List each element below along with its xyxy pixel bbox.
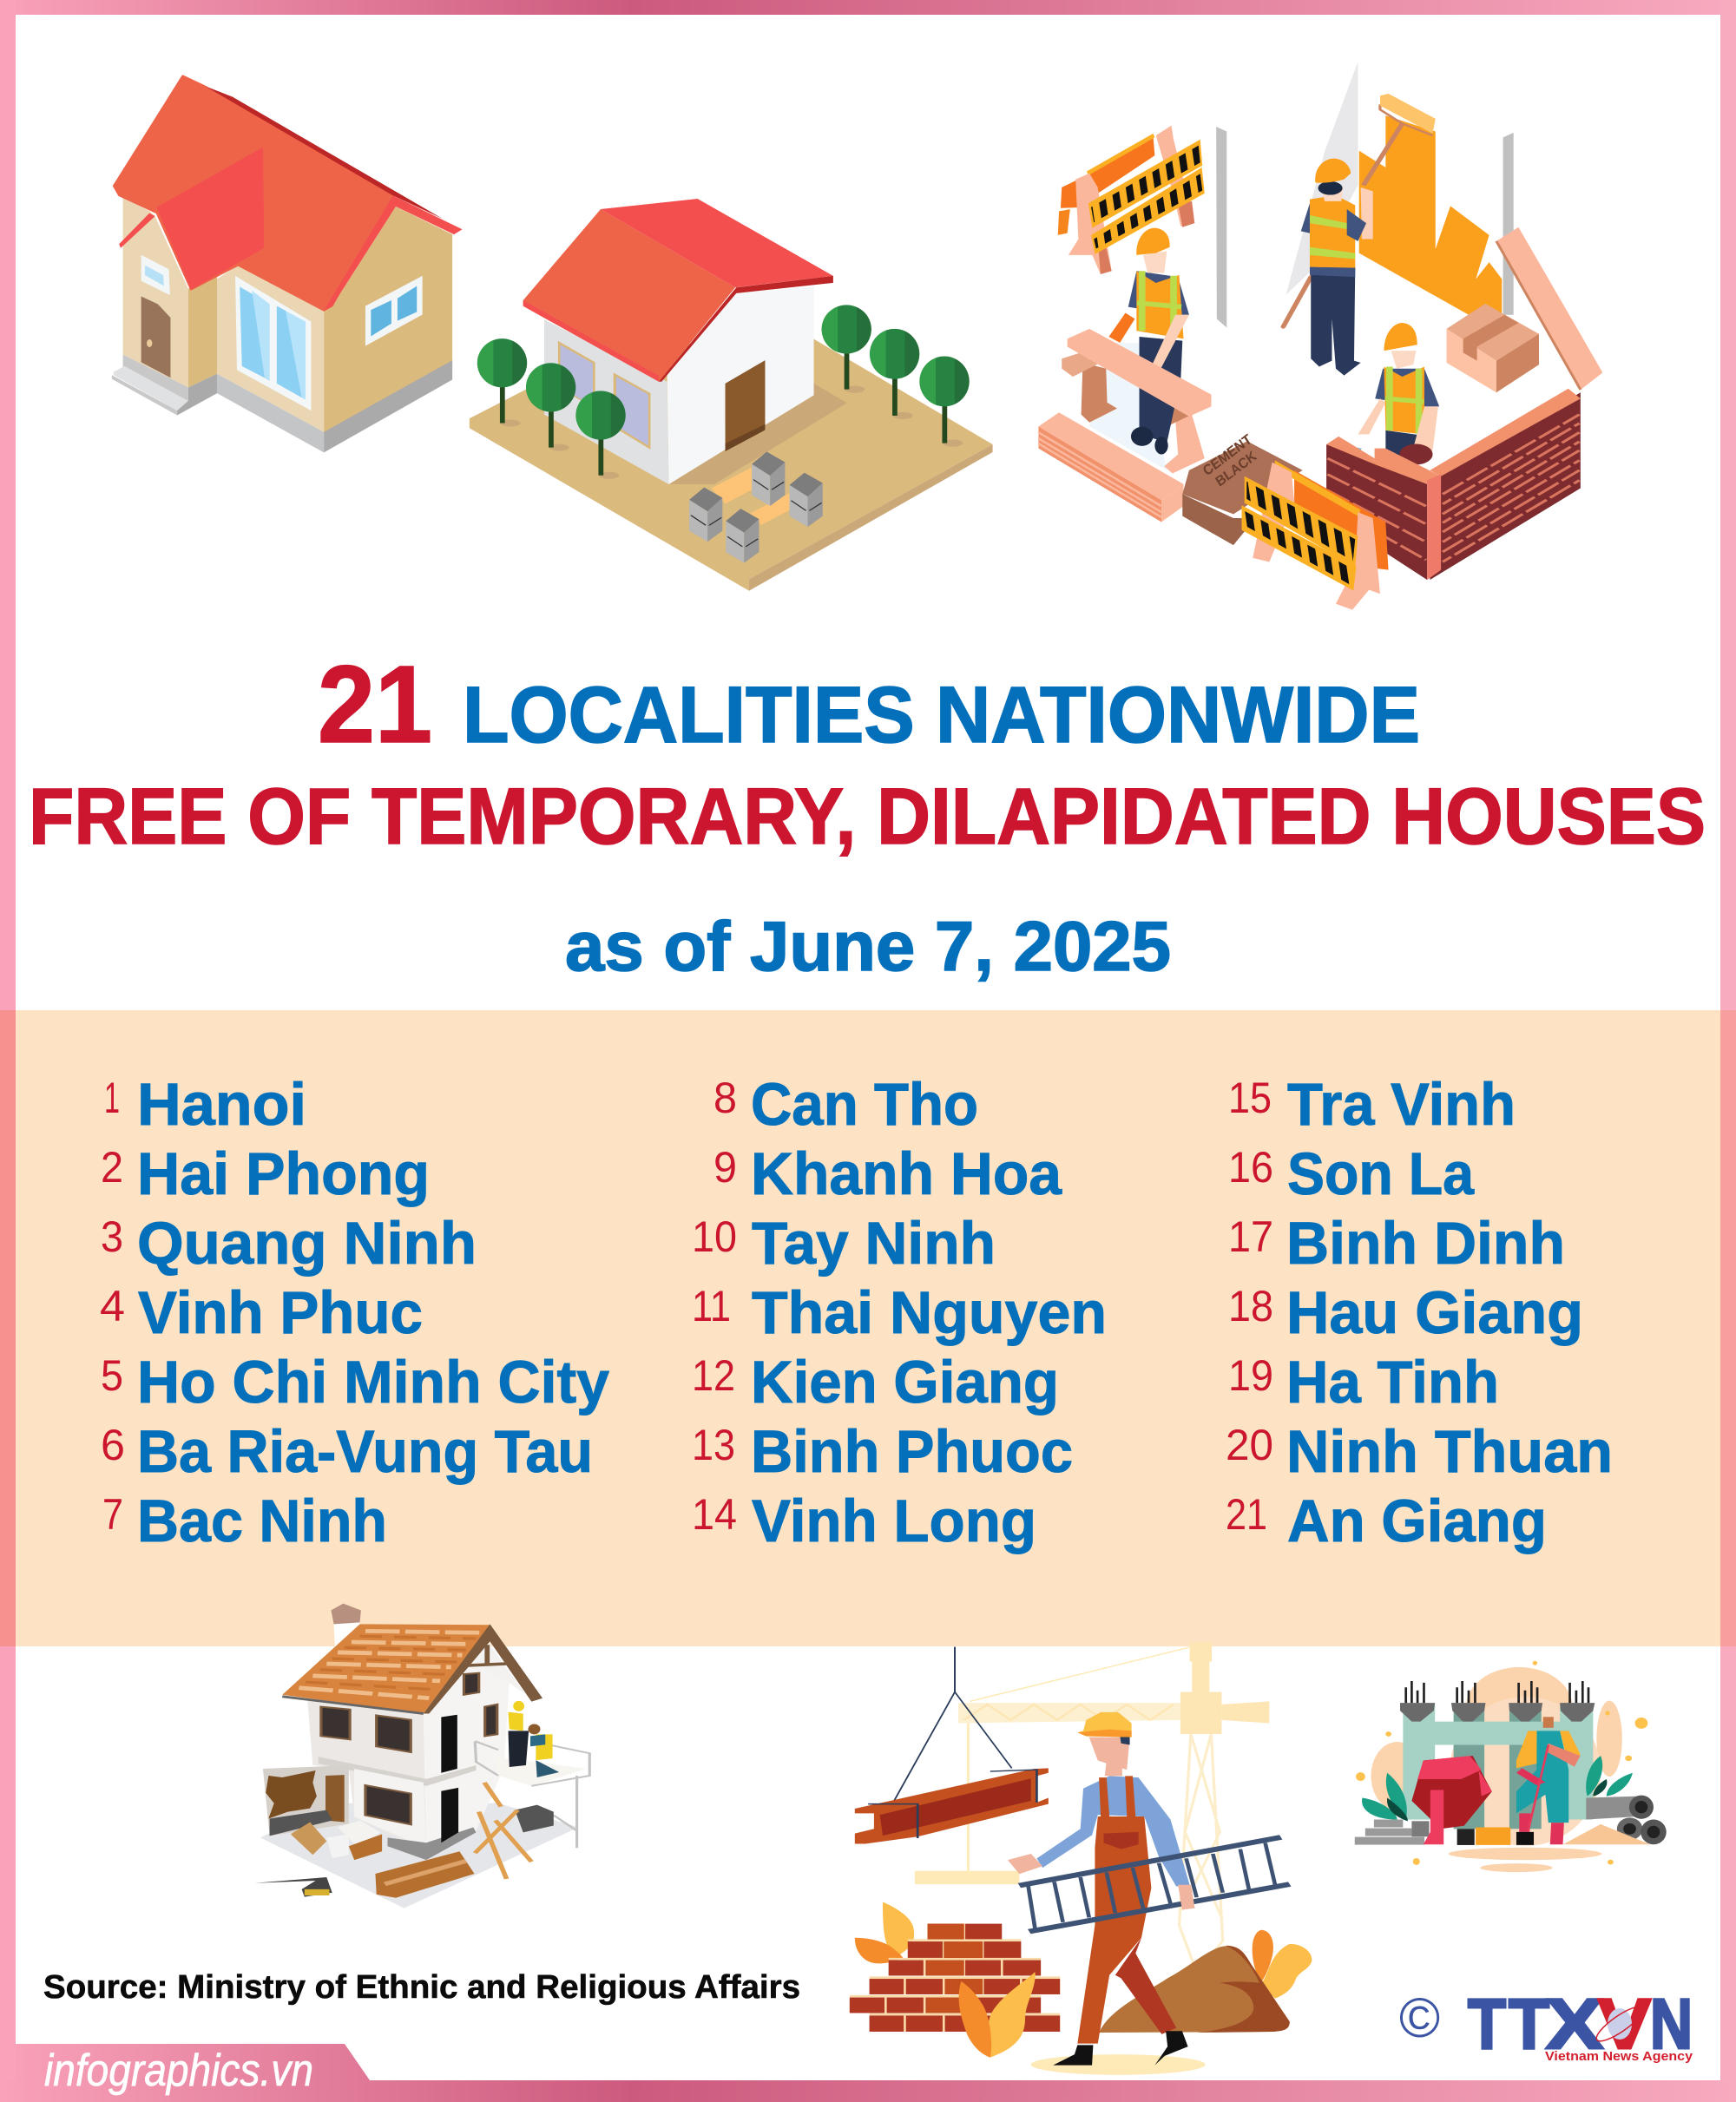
icon: brick wall corner <box>1326 389 1581 580</box>
icon: cement bags: CEMENT <box>1200 432 1255 479</box>
list column 1: localities 1 to 7: Quang Ninh <box>137 1210 477 1277</box>
icon: gate pillars <box>689 452 823 563</box>
logo wordmark: T <box>1468 1985 1506 2064</box>
list column 3: localities 15 to 21: 17 <box>1228 1212 1273 1261</box>
list column 3: localities 15 to 21: Hau Giang <box>1286 1279 1583 1346</box>
icon: damaged wall <box>263 1765 349 1836</box>
icon: scaffold with workers <box>475 1701 589 1879</box>
list column 3: localities 15 to 21: 20 <box>1226 1421 1273 1469</box>
list column 3: localities 15 to 21: 21 <box>1226 1490 1267 1539</box>
list column 1: localities 1 to 7: Ba Ria-Vung Tau <box>137 1418 593 1485</box>
heading line 1 <box>318 643 1420 765</box>
list column 2: localities 8 to 14: 10 <box>692 1212 737 1261</box>
list column 1: localities 1 to 7: 6 <box>101 1421 125 1469</box>
list column 2: localities 8 to 14: Tay Ninh <box>752 1210 996 1277</box>
list column 1: localities 1 to 7: Hai Phong <box>137 1140 430 1207</box>
icon: worker with ladder <box>1008 1712 1290 2075</box>
illustration: isometric yellow house with red roof <box>112 76 463 452</box>
list column 1: localities 1 to 7: 2 <box>101 1143 123 1192</box>
icon: cardboard box <box>1447 304 1539 392</box>
list column 2: localities 8 to 14: 9 <box>713 1143 737 1192</box>
icon: top barrier <box>1058 126 1205 274</box>
icon: bottom barrier <box>1242 460 1389 610</box>
list column 2: localities 8 to 14: Vinh Long <box>752 1488 1036 1554</box>
logo: TTXVN Vietnam News Agency <box>1399 1985 1693 2064</box>
source note: Source: Ministry of Ethnic and Religious Affairs <box>43 1969 800 2006</box>
icon: painter worker <box>1301 159 1373 376</box>
list column 1: localities 1 to 7: Ho Chi Minh City <box>137 1349 609 1416</box>
list column 3: localities 15 to 21: Ha Tinh <box>1286 1349 1499 1416</box>
icon: debris and logs <box>254 1821 475 1898</box>
logo wordmark <box>1468 1985 1693 2064</box>
icon: cement bags <box>1182 432 1303 545</box>
illustration: construction workers scene <box>870 62 1602 610</box>
list column 3: localities 15 to 21: 16 <box>1228 1143 1273 1192</box>
icon: brick pile <box>850 1902 1060 2058</box>
heading line 1: LOCALITIES NATIONWIDE <box>463 671 1420 759</box>
icon: sawhorse and planks <box>1038 343 1205 522</box>
icon: small worker with shovel <box>1516 1717 1581 1845</box>
list column 1: localities 1 to 7: 3 <box>101 1212 123 1261</box>
list column 3: localities 15 to 21: 18 <box>1228 1282 1273 1330</box>
list column 1: localities 1 to 7: Vinh Phuc <box>138 1279 423 1346</box>
panel: peach list background band <box>0 1010 1736 1646</box>
icon: tower crane <box>915 1642 1269 1972</box>
heading date: as of June 7, 2025 <box>565 908 1171 986</box>
list column 1: localities 1 to 7 <box>100 1071 609 1554</box>
list column 3: localities 15 to 21: Ninh Thuan <box>1286 1418 1613 1485</box>
logo tagline: Vietnam News Agency <box>1545 2049 1693 2064</box>
list column 2: localities 8 to 14: 8 <box>713 1074 737 1122</box>
list column 3: localities 15 to 21 <box>1226 1071 1613 1554</box>
icon: chimney <box>331 1604 361 1647</box>
icon: dirt mound and plants <box>1099 1930 1312 2033</box>
icon: copyright symbol: © <box>1399 1987 1440 2049</box>
list column 3: localities 15 to 21: An Giang <box>1287 1488 1547 1554</box>
list column 3: localities 15 to 21: Binh Dinh <box>1286 1210 1565 1277</box>
list column 3: localities 15 to 21: Son La <box>1287 1140 1475 1207</box>
icon: cement bags: BLACK <box>1213 449 1259 490</box>
icon: grey bricks <box>1355 1820 1429 1845</box>
icon: far trees <box>870 329 970 447</box>
illustration: house under repair <box>254 1604 589 1908</box>
logo wordmark: N <box>1650 1985 1693 2064</box>
icon: pipes <box>1586 1796 1667 1844</box>
icon: trees <box>477 305 871 479</box>
list column 1: localities 1 to 7: 4 <box>100 1282 125 1330</box>
list column 2: localities 8 to 14 <box>692 1071 1107 1554</box>
list column 3: localities 15 to 21: 19 <box>1228 1351 1273 1400</box>
list column 2: localities 8 to 14: Khanh Hoa <box>751 1140 1062 1207</box>
list column 1: localities 1 to 7: 5 <box>101 1351 123 1400</box>
list column 3: localities 15 to 21: Tra Vinh <box>1287 1071 1516 1138</box>
icon: cement mixer <box>1411 1756 1510 1845</box>
list column 1: localities 1 to 7: Bac Ninh <box>137 1488 387 1554</box>
icon: carpenter worker <box>1068 228 1211 454</box>
title <box>29 643 1706 986</box>
icon: windows and doors <box>321 1673 497 1843</box>
list column 2: localities 8 to 14: 11 <box>692 1282 731 1330</box>
icon: globe and orbit <box>1593 2001 1647 2046</box>
list column 2: localities 8 to 14: 13 <box>692 1421 735 1469</box>
list column 1: localities 1 to 7: 1 <box>104 1074 120 1122</box>
illustration: worker carrying ladder with crane, beam and bricks <box>850 1642 1312 2075</box>
list column 2: localities 8 to 14: Binh Phuoc <box>751 1418 1073 1485</box>
icon: leaves <box>1362 1756 1633 1821</box>
list column 2: localities 8 to 14: Can Tho <box>751 1071 978 1138</box>
footer tab with site name: infographics.vn <box>44 2046 313 2096</box>
list column 2: localities 8 to 14: 12 <box>692 1351 735 1400</box>
list column 1: localities 1 to 7: 7 <box>102 1490 123 1539</box>
list column 2: localities 8 to 14: Thai Nguyen <box>752 1279 1107 1346</box>
list column 2: localities 8 to 14: Kien Giang <box>751 1349 1059 1416</box>
logo wordmark: V <box>1598 1985 1651 2064</box>
icon: leaning plank <box>1496 227 1602 390</box>
icon: hanging steel beam <box>855 1647 1049 1843</box>
icon: concrete columns <box>1400 1681 1595 1829</box>
list column 3: localities 15 to 21: 15 <box>1228 1074 1272 1122</box>
logo wordmark: T <box>1509 1985 1549 2064</box>
logo wordmark: X <box>1546 1985 1603 2064</box>
illustration: concrete columns and worker with mixer <box>1355 1661 1667 1872</box>
illustration: white house on plot with trees and gate <box>470 199 993 591</box>
icon: peach background blobs <box>1371 1667 1622 1872</box>
icon: sand and dots <box>1356 1661 1650 1865</box>
list column 2: localities 8 to 14: 14 <box>692 1490 737 1539</box>
list column 1: localities 1 to 7: Hanoi <box>137 1071 306 1138</box>
icon: mason worker <box>1338 323 1439 464</box>
heading line 1: 21 <box>318 643 432 765</box>
icon: tiled roof <box>282 1624 542 1714</box>
